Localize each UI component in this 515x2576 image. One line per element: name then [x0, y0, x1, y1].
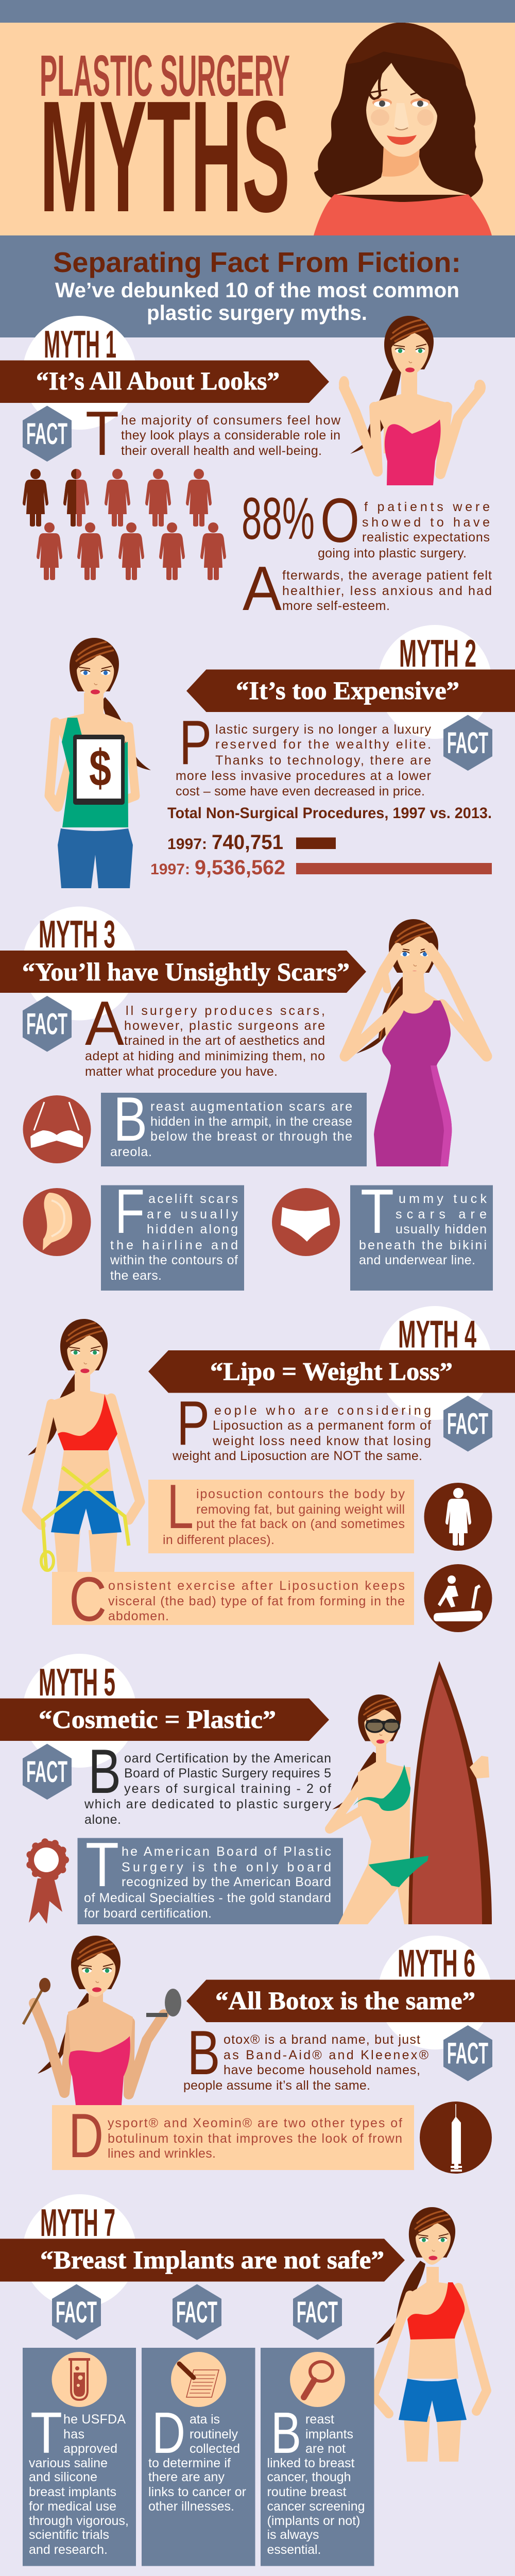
panel: myth 5: [0, 1654, 492, 1924]
fact card: breast implants: cancer, though: [267, 2470, 351, 2484]
fact badge: FACT: [26, 417, 67, 451]
fact card: USFDA: for medical use: [29, 2499, 116, 2514]
fact badge: [443, 1396, 492, 1452]
bar chart: non-surgical procedures: [150, 805, 492, 879]
afterwards text: [243, 553, 492, 623]
fact text: P: [179, 707, 212, 777]
fact text: [84, 1736, 332, 1827]
fact badge: [23, 406, 72, 462]
bar chart: non-surgical procedures: 1997:: [167, 836, 207, 853]
illustration: worried woman in purple dress: [345, 919, 487, 1166]
fact text: as Band-Aid® and Kleenex®: [224, 2048, 429, 2062]
callout: tummy tuck scars: beneath the bikini: [359, 1238, 487, 1252]
myth 3 badge: [23, 907, 136, 1020]
callout: breast augmentation scars: areola.: [110, 1145, 152, 1159]
myth 7 banner: [0, 2239, 405, 2281]
illustration: woman with surfboard: [330, 1661, 492, 1924]
fact card: breast implants: (implants or not): [267, 2514, 360, 2528]
afterwards text: A: [243, 553, 282, 623]
myth 4 banner: [148, 1350, 515, 1393]
callout: dysport and xeomin: botulinum toxin that improves the look of frown: [108, 2131, 402, 2146]
callout: consistent exercise: onsistent exercise after Liposuction keeps: [108, 1579, 405, 1593]
fact card: breast implants: implants: [305, 2427, 353, 2442]
fact card: data: there are any: [148, 2470, 225, 2484]
illustration: woman with tape measure: [27, 1319, 140, 1572]
callout: facelift scars: hidden along: [147, 1222, 238, 1236]
myth 4 badge: [378, 1306, 492, 1420]
fact text: their overall health and well-being.: [121, 444, 322, 458]
panel: myth 6: [23, 1936, 515, 2174]
fact card: USFDA: has: [63, 2427, 84, 2442]
panel: myth 3: [0, 907, 493, 1291]
icon: ear: [23, 1188, 91, 1256]
callout: american board: [77, 1829, 343, 1924]
fact badge: FACT: [26, 1008, 67, 1041]
fact text: Thanks to technology, there are: [215, 753, 431, 768]
fact text: B: [187, 2018, 220, 2088]
fact card: data: routinely: [190, 2427, 238, 2442]
header band: [0, 0, 515, 235]
callout: facelift scars: acelift scars: [148, 1192, 238, 1206]
intro band: Separating Fact From Fiction:: [53, 246, 461, 278]
fact card: USFDA: through vigorous,: [29, 2514, 129, 2528]
88 percent stat: 88%: [242, 486, 315, 552]
callout: liposuction contours: L: [167, 1471, 194, 1541]
fact card: data: collected: [190, 2442, 240, 2456]
fact card: USFDA: and research.: [29, 2543, 108, 2557]
icon: award ribbon: [28, 1841, 66, 1924]
callout: american board: T: [85, 1829, 119, 1900]
fact text: T: [85, 398, 119, 468]
fact text: eople who are considering: [214, 1403, 431, 1418]
myth 7 badge: [23, 2194, 136, 2308]
bar chart: non-surgical procedures: 1997:: [150, 861, 190, 878]
panel: myth 4: [27, 1306, 515, 1634]
fact card: data: D: [152, 2400, 185, 2465]
callout: breast augmentation scars: reast augmentation scars are: [150, 1099, 352, 1114]
fact text: oard Certification by the American: [124, 1751, 331, 1766]
bar chart: non-surgical procedures: Total Non-Surgical Procedures, 1997 vs. 2013.: [167, 805, 492, 822]
callout: breast augmentation scars: hidden in the armpit, in the crease: [150, 1114, 352, 1129]
myth 3 banner: “You’ll have Unsightly Scars”: [22, 957, 350, 986]
fact card: breast implants: essential.: [267, 2543, 321, 2557]
callout: facelift scars: the hairline and: [110, 1238, 238, 1252]
fact card: data: ata is: [190, 2412, 220, 2427]
myth 7 banner: “Breast Implants are not safe”: [40, 2245, 384, 2274]
callout: breast augmentation scars: B: [113, 1084, 147, 1154]
callout: consistent exercise: visceral (the bad) type of fat from forming in the: [108, 1594, 405, 1608]
fact card: breast implants: are not: [305, 2442, 346, 2456]
illustration: woman with tablet: [49, 638, 151, 888]
fact text: cost – some have even decreased in price.: [176, 784, 425, 799]
fact text: lastic surgery is no longer a luxury: [215, 722, 432, 737]
illustration: woman with makeup brush and mirror: [23, 1936, 181, 2105]
myth 3 banner: [0, 951, 366, 993]
icon: female figure: [424, 1483, 492, 1551]
myth 6 banner: “All Botox is the same”: [215, 1986, 475, 2015]
myth 1 banner: “It’s All About Looks”: [36, 366, 280, 395]
fact text: Liposuction as a permanent form of: [213, 1418, 431, 1433]
fact text: weight and Liposuction are NOT the same.: [172, 1449, 422, 1463]
fact card: USFDA: scientific trials: [29, 2528, 109, 2542]
callout: tummy tuck scars: usually hidden: [396, 1222, 487, 1236]
afterwards text: more self-esteem.: [282, 599, 390, 613]
fact text: [85, 988, 325, 1079]
fact text: however, plastic surgeons are: [124, 1019, 325, 1033]
fact badge: FACT: [176, 2296, 217, 2329]
callout: dysport and xeomin: D: [68, 2100, 104, 2171]
callout: liposuction contours: iposuction contours the body by: [196, 1487, 405, 1501]
callout: american board: Surgery is the only board: [122, 1860, 331, 1874]
myth 1 badge: [23, 316, 136, 430]
afterwards text: fterwards, the average patient felt: [282, 568, 492, 583]
88 percent stat: [242, 485, 490, 561]
myth 7 badge: MYTH 7: [40, 2201, 115, 2244]
88 percent stat: showed to have: [362, 515, 490, 530]
fact card: data: links to cancer or: [148, 2485, 246, 2499]
icon: treadmill runner: [424, 1564, 492, 1632]
intro band: We’ve debunked 10 of the most common: [55, 278, 459, 302]
callout: consistent exercise: abdomen.: [108, 1609, 169, 1623]
callout: facelift scars: [101, 1176, 244, 1291]
fact badge: [443, 2025, 492, 2081]
icon: test tube: [52, 2352, 107, 2407]
myth 2 badge: [378, 625, 492, 739]
illustration: woman in red top and shorts: [373, 2207, 487, 2462]
callout: facelift scars: F: [115, 1176, 145, 1246]
fact text: otox® is a brand name, but just: [224, 2032, 420, 2047]
fact badge: [293, 2284, 342, 2340]
fact text: reserved for the wealthy elite.: [215, 737, 431, 752]
fact badge: FACT: [26, 1755, 67, 1789]
fact card: USFDA: approved: [63, 2442, 117, 2456]
88 percent stat: going into plastic surgery.: [318, 546, 467, 561]
illustration: woman with tablet: $: [89, 739, 111, 797]
88 percent stat: f patients were: [364, 500, 490, 514]
callout: dysport and xeomin: ysport® and Xeomin® are two other types of: [108, 2116, 402, 2130]
fact text: P: [177, 1388, 210, 1458]
fact badge: FACT: [56, 2296, 97, 2329]
fact badge: [23, 996, 72, 1052]
callout: liposuction contours: put the fat back on (and sometimes: [196, 1517, 405, 1531]
icon: underwear: [272, 1188, 340, 1256]
intro band: plastic surgery myths.: [147, 301, 367, 325]
fact text: trained in the art of aesthetics and: [124, 1033, 325, 1048]
fact card: breast implants: [261, 2348, 374, 2566]
panel: myth 1: [0, 316, 492, 623]
callout: consistent exercise: C: [69, 1564, 107, 1634]
callout: tummy tuck scars: and underwear line.: [359, 1253, 475, 1267]
fact card: breast implants: is always: [267, 2528, 319, 2542]
callout: liposuction contours: removing fat, but gaining weight will: [196, 1502, 405, 1517]
icon: bra: [23, 1095, 91, 1163]
fact badge: [443, 715, 492, 771]
title: [40, 43, 290, 245]
callout: tummy tuck scars: ummy tuck: [399, 1192, 487, 1206]
fact text: B: [88, 1736, 121, 1806]
fact card: data: to determine if: [148, 2456, 231, 2470]
fact card: USFDA: various saline: [29, 2456, 108, 2470]
callout: american board: of Medical Specialties - the gold standard: [84, 1891, 331, 1905]
callout: liposuction contours: [148, 1471, 414, 1553]
icon: magnifying glass: [290, 2352, 345, 2407]
myth 5 badge: [23, 1654, 136, 1768]
fact text: [176, 707, 432, 799]
afterwards text: healthier, less anxious and had: [282, 584, 492, 598]
fact text: matter what procedure you have.: [85, 1064, 278, 1079]
fact text: Board of Plastic Surgery requires 5: [124, 1766, 331, 1781]
fact text: [172, 1388, 431, 1463]
icon: syringe: [420, 2102, 492, 2174]
fact text: years of surgical training - 2 of: [124, 1782, 331, 1796]
fact badge: [23, 1744, 72, 1800]
panel: myth 2: [49, 625, 515, 888]
fact card: breast implants: linked to breast: [267, 2456, 355, 2470]
myth 4 banner: “Lipo = Weight Loss”: [210, 1357, 453, 1386]
myth 6 badge: [378, 1936, 492, 2049]
callout: breast augmentation scars: [101, 1084, 367, 1166]
fact card: breast implants: routine breast: [267, 2485, 347, 2499]
fact card: USFDA: T: [30, 2400, 62, 2465]
callout: tummy tuck scars: scars are: [396, 1207, 487, 1222]
fact text: [183, 2018, 429, 2093]
fact text: he majority of consumers feel how: [121, 413, 341, 428]
myth 5 badge: MYTH 5: [39, 1660, 115, 1704]
callout: american board: recognized by the American Board: [122, 1875, 331, 1889]
myth 1 badge: MYTH 1: [44, 323, 116, 366]
bar chart: non-surgical procedures: 9,536,562: [195, 856, 285, 879]
fact text: ll surgery produces scars,: [126, 1004, 325, 1018]
panel: myth 7: [0, 2194, 487, 2566]
fact text: alone.: [84, 1812, 121, 1827]
fact card: USFDA: [23, 2348, 136, 2566]
fact badge: FACT: [297, 2296, 338, 2329]
myth 2 banner: “It’s too Expensive”: [236, 676, 459, 705]
fact text: more less invasive procedures at a lower: [176, 769, 431, 783]
fact text: have become household names,: [224, 2063, 420, 2077]
fact text: adept at hiding and minimizing them, no: [85, 1049, 325, 1063]
callout: consistent exercise: [52, 1564, 414, 1634]
fact card: USFDA: he USFDA: [63, 2412, 126, 2427]
88 percent stat: realistic expectations: [362, 530, 490, 545]
fact text: [85, 398, 341, 468]
callout: facelift scars: are usually: [147, 1207, 238, 1222]
fact text: A: [85, 988, 125, 1058]
fact card: USFDA: breast implants: [29, 2485, 116, 2499]
callout: american board: he American Board of Plastic: [122, 1844, 331, 1859]
fact card: data: [142, 2348, 255, 2566]
myth 6 banner: [186, 1980, 515, 2022]
fact text: people assume it’s all the same.: [183, 2078, 370, 2093]
bar chart: non-surgical procedures: 740,751: [212, 831, 283, 854]
myth 5 banner: [0, 1699, 329, 1741]
fact text: weight loss need know that losing: [212, 1434, 431, 1448]
callout: tummy tuck scars: T: [360, 1176, 394, 1246]
fact card: breast implants: reast: [305, 2412, 334, 2427]
88 percent stat: O: [320, 485, 359, 555]
pictogram: 10 women: [23, 469, 226, 580]
icon: pen and paper: [171, 2352, 226, 2407]
callout: breast augmentation scars: below the breast or through the: [150, 1129, 352, 1144]
myth 1 banner: [0, 361, 329, 403]
callout: facelift scars: within the contours of: [110, 1253, 238, 1267]
callout: tummy tuck scars: [350, 1176, 493, 1291]
fact text: they look plays a considerable role in: [121, 428, 340, 443]
callout: liposuction contours: in different places).: [163, 1533, 274, 1547]
fact card: USFDA: and silicone: [29, 2470, 97, 2484]
callout: facelift scars: the ears.: [110, 1268, 162, 1283]
callout: dysport and xeomin: lines and wrinkles.: [108, 2146, 216, 2161]
myth 2 banner: [186, 670, 515, 712]
callout: american board: for board certification.: [84, 1906, 212, 1921]
callout: dysport and xeomin: [52, 2100, 414, 2171]
fact badge: [52, 2284, 101, 2340]
intro band: [0, 235, 515, 337]
fact text: which are dedicated to plastic surgery: [84, 1797, 332, 1811]
illustration: woman in pink: [339, 316, 486, 485]
myth 3 badge: MYTH 3: [39, 912, 115, 956]
illustration: woman portrait: [314, 23, 492, 235]
fact card: data: other illnesses.: [148, 2499, 234, 2514]
fact badge: [173, 2284, 221, 2340]
fact card: breast implants: cancer screening: [267, 2499, 365, 2514]
fact card: breast implants: B: [271, 2400, 301, 2465]
myth 5 banner: “Cosmetic = Plastic”: [39, 1705, 276, 1734]
